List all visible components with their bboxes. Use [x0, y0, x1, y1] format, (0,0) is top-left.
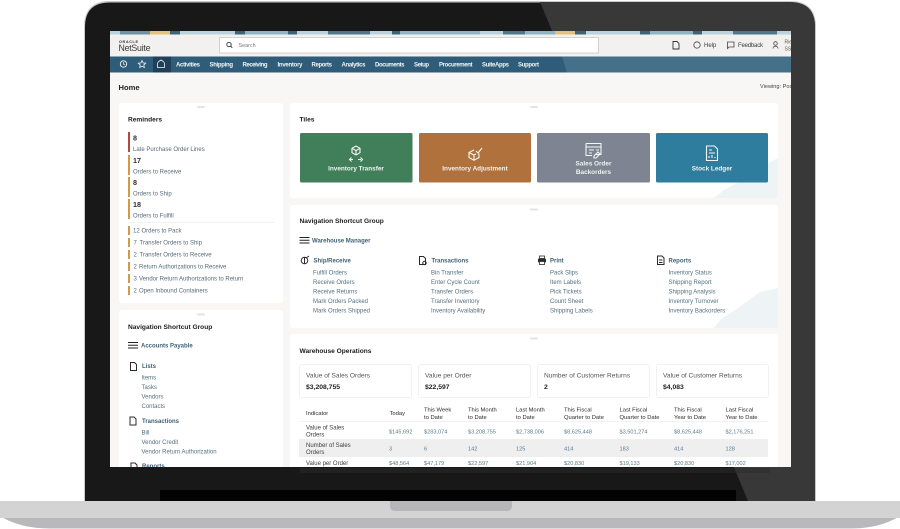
icon: menu	[128, 342, 138, 348]
navigation labels: Setup	[414, 62, 429, 68]
tile: stock ledger: Stock Ledger	[692, 166, 733, 172]
navigation labels: Shipping	[210, 62, 233, 68]
feedback link	[728, 42, 764, 49]
row: value of sales orders: $8,625,448	[564, 430, 592, 436]
column: transactions: Bin Transfer	[431, 270, 463, 276]
KPI: value of sales orders: $3,208,755	[306, 384, 340, 391]
navigation labels: Reports	[312, 62, 333, 68]
panel: navigation shortcut group, warehouse manager: Navigation Shortcut Group	[300, 218, 384, 225]
laptop screen	[110, 31, 792, 480]
column: ship/receive: Receive Returns	[313, 290, 357, 296]
column: print	[538, 256, 593, 314]
row: value of sales orders: Orders	[306, 432, 324, 438]
table header: Quarter to Date	[620, 415, 659, 421]
row: value of sales orders: $283,074	[424, 430, 447, 436]
panel: reminders	[119, 103, 283, 303]
table header: Quarter to Date	[564, 415, 604, 421]
NetSuite logo: ORACLE	[119, 40, 138, 44]
small reminders list: 2	[134, 264, 138, 270]
navigation labels: Procurement	[439, 62, 472, 68]
panel: navigation shortcut group, accounts payable: Accounts Payable	[141, 344, 193, 350]
row: number of sales orders	[306, 443, 735, 456]
large reminder: orders to fulfill	[128, 199, 174, 220]
small reminders list	[128, 226, 243, 295]
KPI: number of customer returns: 2	[544, 384, 548, 391]
row: value of sales orders: $2,176,251	[726, 430, 754, 436]
KPI: value per order: $22,597	[425, 384, 450, 391]
large reminder: orders to ship: Orders to Ship	[133, 192, 172, 198]
help link: Help	[704, 43, 717, 49]
column: transactions: Transfer Inventory	[431, 299, 479, 305]
table header: Indicator	[306, 411, 328, 417]
row: value of sales orders	[306, 426, 754, 438]
table header: Last Fiscal	[726, 408, 753, 414]
table header: to Date	[468, 415, 487, 421]
KPI: number of customer returns: Number of Customer Returns	[544, 372, 631, 380]
row: number of sales orders: 6	[424, 446, 427, 452]
small reminders list: 2	[134, 252, 138, 258]
data table	[299, 408, 768, 467]
column: transactions: Enter Cycle Count	[431, 280, 480, 286]
row: value of sales orders: Value of Sales	[306, 426, 344, 432]
row: number of sales orders: Number of Sales	[306, 443, 351, 449]
large reminder: orders to fulfill: 18	[133, 200, 141, 209]
row: number of sales orders: 3	[389, 446, 392, 452]
KPI: value of customer returns: Value of Customer Returns	[663, 372, 743, 380]
icon: document	[673, 42, 679, 49]
main navigation bar	[110, 56, 791, 72]
small reminders list: 3	[134, 276, 138, 282]
panel: navigation shortcut group, accounts payable	[119, 310, 283, 480]
table header: Year to Date	[726, 415, 758, 421]
table header: Today	[390, 411, 405, 417]
table header: Last Month	[516, 408, 545, 414]
small reminders list: Open Inbound Containers	[139, 288, 208, 294]
user menu: SS	[784, 46, 792, 52]
column: reports: Inventory Backorders	[668, 308, 725, 314]
KPI: value of customer returns: $4,083	[663, 384, 684, 391]
KPI: number of customer returns	[538, 364, 650, 398]
row: value of sales orders: $2,738,006	[516, 430, 544, 436]
lists group: Lists	[142, 364, 157, 370]
row: value per order: $22,597	[468, 461, 488, 467]
KPI: value of sales orders	[300, 364, 412, 398]
lists group: Contacts	[142, 404, 165, 410]
column: transactions: Transactions	[432, 258, 469, 264]
panel: warehouse operations: Warehouse Operations	[300, 348, 372, 355]
column: reports: Inventory Turnover	[668, 299, 719, 305]
small reminders list: Vendor Return Authorizations to Return	[139, 276, 243, 282]
row: value per order: Value per Order	[306, 461, 348, 467]
NetSuite logo	[119, 40, 150, 51]
column: reports: Reports	[668, 258, 692, 264]
decorative colour stripe	[110, 31, 791, 34]
column: ship/receive: Mark Orders Shipped	[313, 308, 370, 314]
user menu	[772, 40, 791, 50]
laptop base	[0, 501, 900, 528]
panel: navigation shortcut group, accounts payable: Navigation Shortcut Group	[128, 324, 212, 331]
transactions group: Bill	[142, 430, 150, 436]
column: transactions	[420, 256, 485, 314]
large reminder: orders to ship	[128, 177, 172, 198]
search box	[220, 38, 598, 53]
table header: This Fiscal	[564, 408, 592, 414]
column: transactions: Transfer Orders	[431, 290, 473, 296]
icon: star	[138, 60, 146, 68]
column: ship/receive: Receive Orders	[313, 280, 355, 286]
column: print: Pick Tickets	[550, 290, 582, 296]
large reminder: late purchase order lines	[128, 132, 205, 153]
base notch	[390, 501, 512, 511]
icon: home	[158, 60, 164, 68]
lists group: Tasks	[142, 385, 157, 391]
row: value of sales orders: $8,625,448	[674, 430, 702, 436]
lists group: Items	[142, 376, 156, 382]
panel: navigation shortcut group, warehouse manager	[290, 205, 778, 328]
navigation labels: Inventory	[278, 62, 303, 68]
tile: sales order backorders: Backorders	[576, 169, 612, 176]
navigation labels: SuiteApps	[482, 62, 510, 68]
column: reports: Inventory Status	[668, 270, 712, 276]
navigation labels: Analytics	[342, 62, 366, 68]
icon: history	[120, 61, 127, 67]
tile: inventory adjustment: Inventory Adjustment	[442, 166, 509, 172]
small reminders list: Orders to Pack	[142, 228, 183, 234]
lists group: Vendors	[142, 394, 164, 400]
laptop lid bezel	[84, 1, 816, 502]
column: transactions: Inventory Availability	[431, 308, 485, 314]
row: value of sales orders: $3,208,755	[468, 430, 496, 436]
small reminders list: 12	[133, 228, 140, 234]
page title: Home	[118, 83, 140, 92]
row: number of sales orders: Orders	[306, 450, 324, 456]
KPI: value per order	[418, 364, 530, 398]
row: value per order: $47,179	[424, 461, 444, 467]
feedback link: Feedback	[738, 43, 764, 49]
table header: This Month	[468, 408, 497, 414]
column: print: Print	[550, 258, 564, 264]
icon: menu	[300, 238, 310, 243]
table header: to Date	[424, 415, 443, 421]
lists group	[130, 362, 165, 410]
large reminder: orders to ship: 8	[133, 178, 137, 187]
column: print: Shipping Labels	[550, 308, 593, 314]
reports group: Reports	[142, 464, 165, 470]
large reminder: orders to receive: 17	[133, 156, 141, 165]
large reminder: orders to receive	[128, 155, 182, 176]
row: number of sales orders: 128	[726, 446, 735, 452]
small reminders list: Transfer Orders to Ship	[140, 240, 203, 246]
table header: This Week	[424, 408, 451, 414]
user menu: Rie	[784, 40, 792, 46]
row: value per order: $19,133	[620, 461, 640, 467]
table header: This Fiscal	[674, 408, 702, 414]
panel: reminders: Reminders	[128, 116, 162, 124]
column: reports	[658, 256, 725, 314]
large reminder: orders to fulfill: Orders to Fulfill	[133, 214, 174, 220]
KPI: value of customer returns	[656, 364, 768, 398]
transactions group: Vendor Credit	[142, 440, 179, 446]
column: ship/receive	[301, 256, 370, 314]
reports group	[130, 462, 164, 467]
row: value per order: $17,002	[726, 461, 746, 467]
large reminder: orders to receive: Orders to Receive	[133, 170, 182, 176]
column: reports: Shipping Report	[668, 280, 712, 286]
tile: inventory transfer: Inventory Transfer	[328, 166, 384, 172]
column: ship/receive: Fulfill Orders	[313, 270, 347, 276]
row: value of sales orders: $145,692	[389, 430, 412, 436]
tile: sales order backorders: Sales Order	[576, 160, 612, 168]
KPI: value of sales orders: Value of Sales Orders	[306, 372, 371, 380]
KPI: value per order: Value per Order	[425, 372, 472, 380]
table header	[306, 408, 758, 421]
row: value of sales orders: $3,501,274	[620, 430, 648, 436]
row: number of sales orders: 183	[620, 446, 629, 452]
row: value per order: $20,830	[674, 461, 694, 467]
small reminders list: 7	[134, 240, 138, 246]
navigation labels: Receiving	[242, 62, 268, 68]
small reminders list: Transfer Orders to Receive	[140, 252, 212, 258]
panel: navigation shortcut group, warehouse manager: Warehouse Manager	[312, 238, 371, 244]
tile: stock ledger	[656, 133, 768, 182]
table header: Year to Date	[674, 415, 706, 421]
help link	[694, 42, 717, 49]
navigation labels	[176, 62, 539, 68]
column: print: Pack Slips	[550, 270, 578, 276]
column: print: Item Labels	[550, 280, 581, 286]
row: value per order	[306, 461, 746, 467]
large reminder: late purchase order lines: 8	[133, 134, 137, 142]
row: value per order: $21,904	[516, 461, 536, 467]
column: reports: Shipping Analysis	[668, 290, 716, 296]
row: number of sales orders: 414	[674, 446, 683, 452]
large reminder: late purchase order lines: Late Purchase Order Lines	[133, 147, 205, 153]
table header: to Date	[516, 415, 535, 421]
small reminders list: Return Authorizations to Receive	[139, 264, 227, 270]
row: number of sales orders: 414	[564, 446, 573, 452]
panel: tiles	[290, 103, 778, 198]
top header bar	[119, 37, 791, 54]
column: ship/receive: Ship/Receive	[314, 258, 352, 264]
panel: tiles: Tiles	[300, 116, 315, 124]
NetSuite logo: NetSuite	[118, 43, 151, 53]
navigation labels: Activities	[176, 62, 201, 68]
navigation labels: Support	[518, 62, 539, 68]
transactions group	[130, 417, 217, 456]
small reminders list: 2	[134, 288, 138, 294]
column: ship/receive: Mark Orders Packed	[313, 299, 368, 305]
transactions group: Transactions	[142, 419, 180, 425]
row: value per order: $20,830	[564, 461, 584, 467]
transactions group: Vendor Return Authorization	[142, 450, 217, 456]
tile: inventory transfer	[300, 133, 412, 182]
viewing label: Viewing: Pos	[760, 84, 792, 90]
panel: warehouse operations	[290, 334, 778, 474]
table header: Last Fiscal	[620, 408, 647, 414]
tile: sales order backorders	[537, 133, 650, 182]
search box: Search	[238, 43, 256, 49]
row: number of sales orders: 125	[516, 446, 525, 452]
column: print: Count Sheet	[550, 299, 584, 305]
tile: inventory adjustment	[419, 133, 531, 182]
navigation labels: Documents	[375, 62, 405, 68]
row: value per order: $48,564	[389, 461, 409, 467]
row: number of sales orders: 142	[468, 446, 477, 452]
